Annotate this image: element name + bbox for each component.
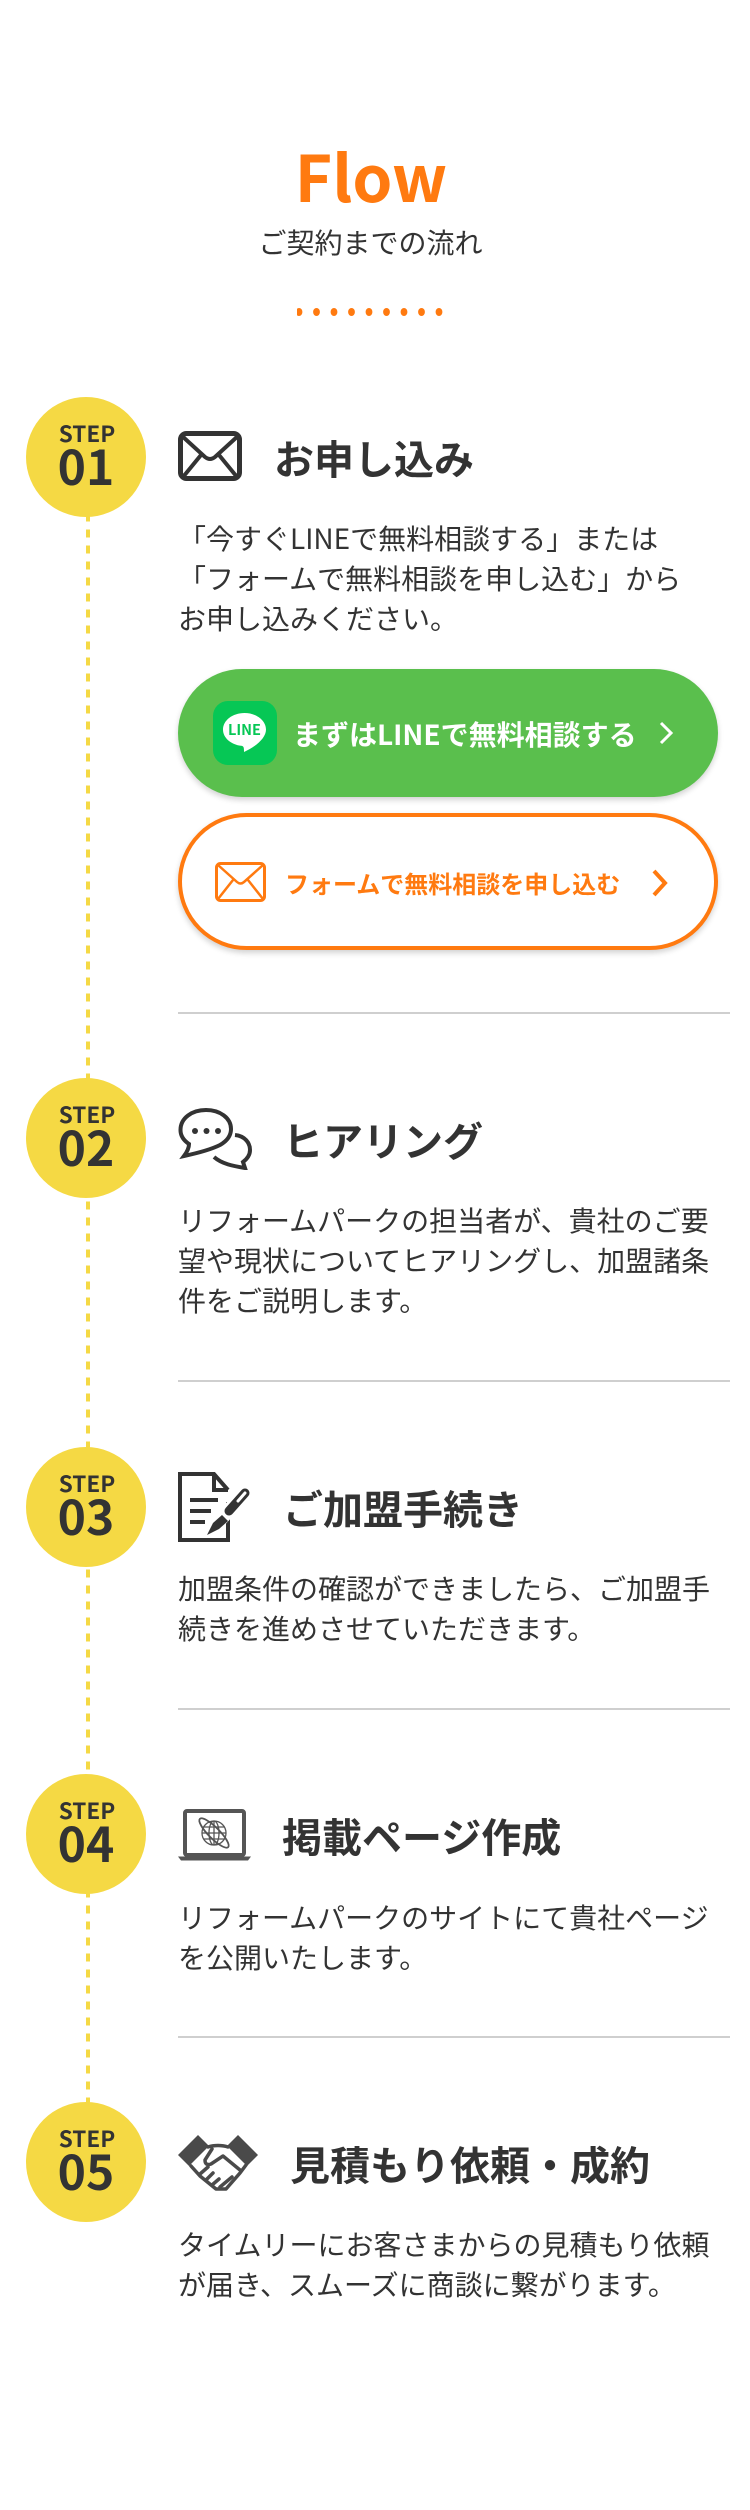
step badge 02: 02 [58, 1110, 114, 1180]
dotted divider [297, 308, 442, 316]
step badge 05 [26, 2102, 146, 2222]
label: フォームで無料相談を申し込む [285, 865, 620, 900]
description: を公開いたします。 [178, 1937, 427, 1977]
icon: laptop with globe [178, 1809, 251, 1860]
heading: ご加盟手続き [283, 1478, 523, 1536]
description: 「今すぐLINEで無料相談する」または [178, 518, 658, 558]
description: 続きを進めさせていただきます。 [178, 1608, 595, 1648]
description: 加盟条件の確認ができましたら、ご加盟手 [178, 1568, 710, 1608]
step badge 04 [26, 1774, 146, 1894]
icon: LINE: LINE [228, 719, 261, 740]
description: リフォームパークのサイトにて貴社ページ [178, 1897, 709, 1937]
icon: LINE [213, 701, 277, 765]
section header [258, 129, 482, 316]
panel: step 03 [26, 1447, 730, 1710]
step badge 02 [26, 1078, 146, 1198]
icon: chevron [660, 722, 673, 744]
heading: 掲載ページ作成 [282, 1806, 561, 1864]
heading: 見積もり依頼・成約 [290, 2134, 650, 2192]
heading: ヒアリング [283, 1110, 483, 1168]
description [178, 1200, 709, 1320]
description: リフォームパークの担当者が、貴社のご要 [178, 1200, 709, 1240]
button: form [178, 813, 718, 950]
step badge 03 [26, 1447, 146, 1567]
subtitle: ご契約までの流れ [258, 222, 482, 262]
step badge 01 [26, 397, 146, 517]
panel: step 05 [26, 2102, 709, 2304]
step badge 03: 03 [58, 1478, 114, 1548]
title: Flow: Flow [295, 129, 447, 221]
description [178, 1897, 709, 1977]
step badge 05: 05 [58, 2134, 114, 2204]
step badge 05: STEP [59, 2122, 115, 2154]
description: 「フォームで無料相談を申し込む」から [178, 558, 681, 598]
step badge 02: STEP [59, 1098, 115, 1130]
step badge 01: 01 [58, 428, 114, 498]
description [178, 518, 681, 638]
button: LINE [178, 669, 718, 797]
icon: envelope [178, 431, 242, 481]
icon: chevron [652, 870, 668, 896]
step badge 03: STEP [59, 1467, 115, 1499]
description: が届き、スムーズに商談に繋がります。 [178, 2264, 676, 2304]
timeline dashed connector [86, 516, 90, 2102]
heading: お申し込み [274, 428, 474, 486]
step badge 01: STEP [59, 417, 115, 449]
description: タイムリーにお客さまからの見積もり依頼 [178, 2224, 709, 2264]
description: 望や現状についてヒアリングし、加盟諸条 [178, 1240, 709, 1280]
icon: handshake [178, 2135, 258, 2191]
label: まずはLINEで無料相談する [293, 714, 637, 754]
step badge 04: 04 [58, 1806, 114, 1876]
description [178, 2224, 709, 2304]
panel: step 01 [26, 397, 730, 1014]
step badge 04: STEP [59, 1794, 115, 1826]
icon: speech bubbles [178, 1108, 252, 1170]
description [178, 1568, 710, 1648]
description: お申し込みください。 [178, 598, 458, 638]
panel: step 04 [26, 1774, 730, 2038]
icon: document and pen [178, 1472, 250, 1542]
description: 件をご説明します。 [178, 1280, 427, 1320]
panel: step 02 [26, 1078, 730, 1382]
icon: envelope [215, 862, 266, 902]
